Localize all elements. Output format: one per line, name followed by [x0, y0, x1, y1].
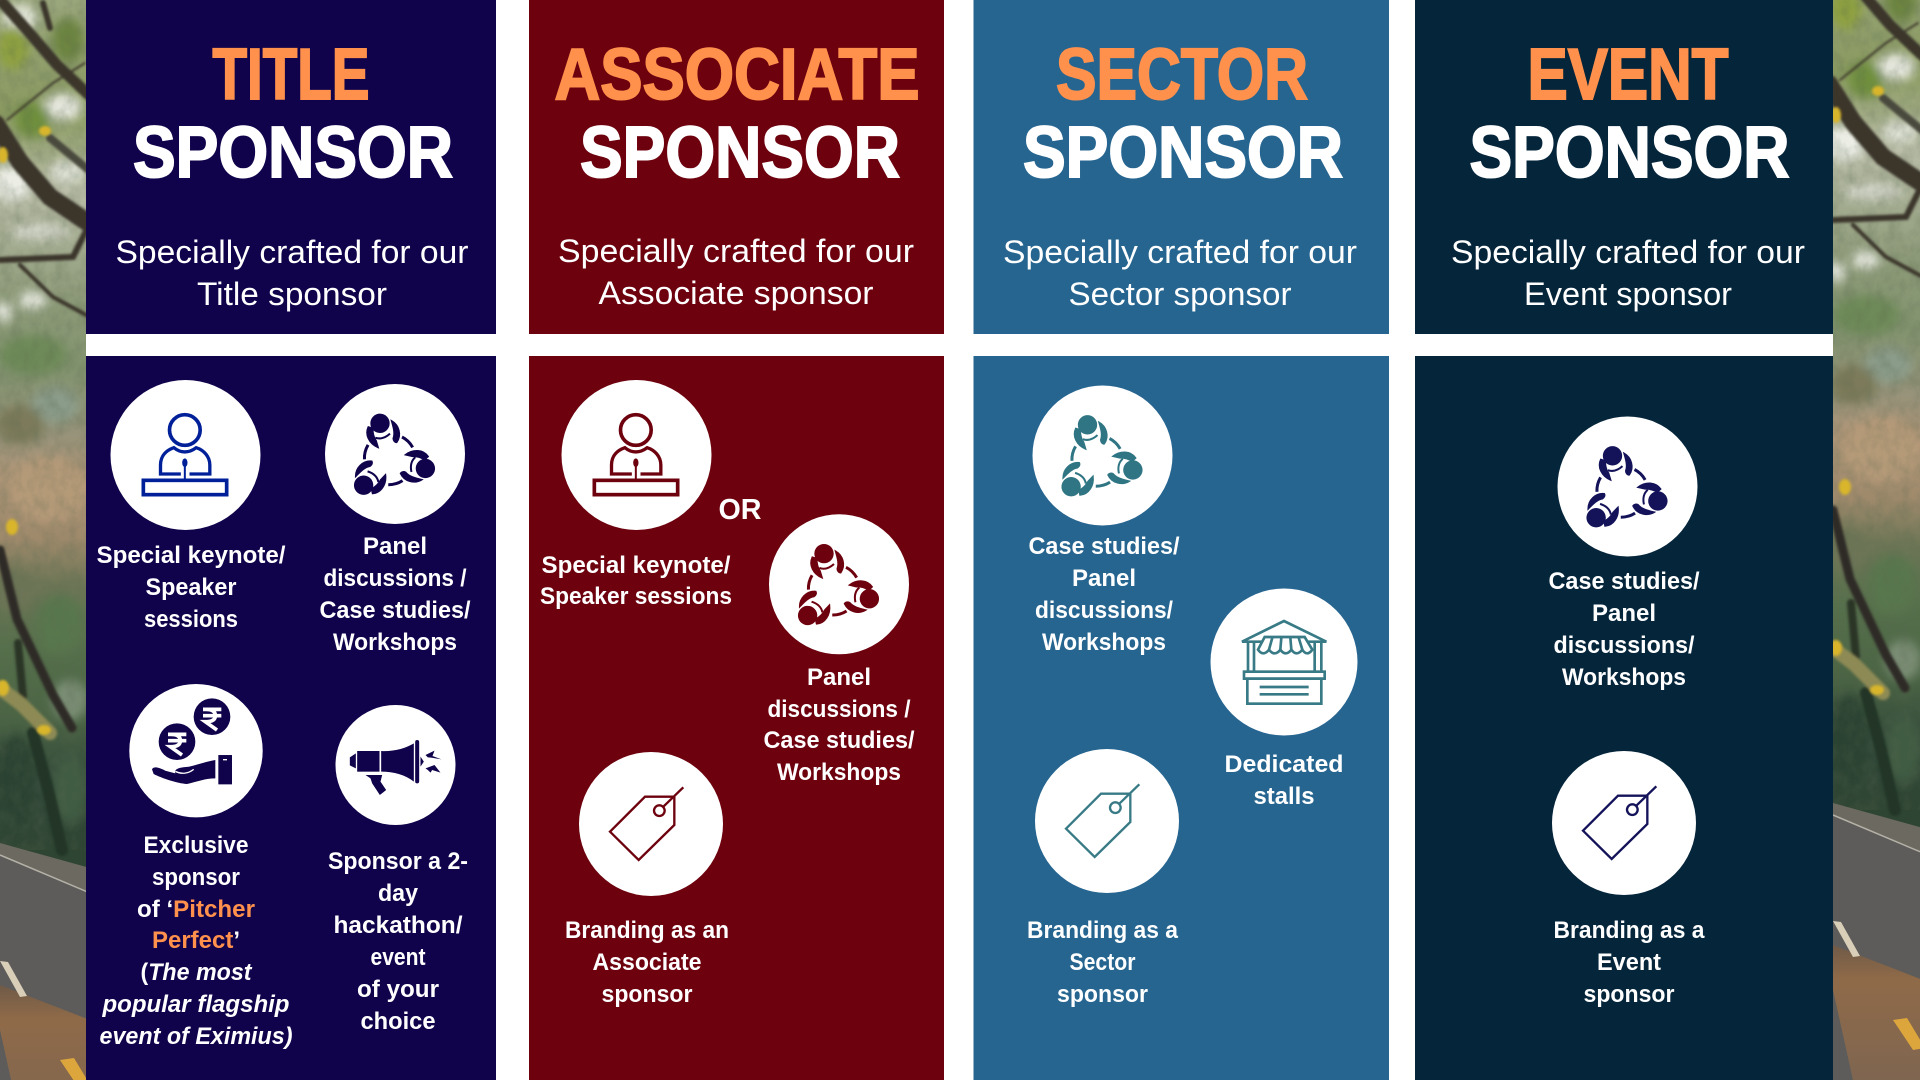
text: or: OR: [718, 494, 762, 526]
heading: title sponsor: TITLE: [212, 35, 370, 115]
text: pitcher perfect sponsorship: of ‘Pitcher: [137, 896, 255, 923]
icon: rupees over hand: [129, 684, 263, 817]
text: dedicated stalls: [1224, 751, 1344, 810]
text: panel discussions: Panel: [363, 533, 427, 560]
text: branding as sector: [1027, 917, 1179, 1008]
icon: panel discussion: [1558, 416, 1698, 556]
text: panel discussions: Case studies/: [320, 597, 471, 624]
text: sector sponsor description: Sector sponsor: [1068, 276, 1292, 312]
heading: event sponsor: SPONSOR: [1470, 113, 1790, 193]
text: hackathon sponsorship: Sponsor a 2-: [328, 848, 468, 875]
heading: event sponsor: [1470, 35, 1790, 193]
heading: associate sponsor: [554, 35, 920, 193]
text: pitcher perfect sponsorship: (The most: [140, 959, 252, 986]
text: branding as event: [1554, 917, 1705, 1008]
icon: keynote speaker: [562, 380, 712, 530]
column: title sponsor: [86, 0, 496, 1080]
text: pitcher perfect sponsorship: Perfect’: [152, 927, 240, 954]
text: panel discussions: Workshops: [333, 629, 457, 656]
text: branding as event: sponsor: [1584, 981, 1674, 1008]
text: branding as associate: [565, 917, 729, 1008]
text: case studies: [1028, 533, 1180, 656]
text: pitcher perfect sponsorship: popular flagship: [101, 991, 290, 1018]
text: case studies: [1548, 568, 1700, 691]
icon: market stall: [1210, 588, 1358, 736]
text: panel discussions: [764, 664, 915, 786]
icon: megaphone: [336, 705, 456, 825]
icon: panel discussion: [325, 384, 465, 524]
text: case studies: Workshops: [1562, 664, 1686, 691]
icon: panel discussion: [1032, 386, 1172, 526]
text: special keynote: Special keynote/: [96, 542, 286, 569]
icon: price tag: [579, 752, 723, 896]
text: associate sponsor description: Specially crafted for our: [558, 233, 914, 269]
icon: price tag: [1035, 749, 1179, 893]
text: case studies: Case studies/: [1548, 568, 1700, 595]
text: panel discussions: Panel: [807, 664, 871, 691]
text: hackathon sponsorship: event: [370, 944, 426, 971]
background photo: right strip of tree-lined road: [1825, 0, 1920, 1080]
heading: title sponsor: [133, 35, 453, 193]
text: panel discussions: Workshops: [777, 759, 901, 786]
text: hackathon sponsorship: day: [378, 880, 419, 907]
text: case studies: Case studies/: [1028, 533, 1180, 560]
heading: associate sponsor: SPONSOR: [580, 113, 900, 193]
heading: sector sponsor: SECTOR: [1056, 35, 1308, 115]
column: associate sponsor: [529, 0, 944, 1080]
panel: sector sponsor benefits: [974, 356, 1389, 1080]
text: event sponsor description: [1451, 234, 1805, 312]
panel: event sponsor benefits: [1415, 356, 1833, 1080]
text: case studies: discussions/: [1554, 632, 1695, 659]
panel: title sponsor header: [86, 0, 496, 334]
heading: event sponsor: EVENT: [1528, 35, 1729, 115]
text: branding as event: Branding as a: [1554, 917, 1705, 944]
text: associate sponsor description: Associate sponsor: [598, 275, 874, 311]
heading: associate sponsor: ASSOCIATE: [554, 35, 920, 115]
heading: sector sponsor: [1023, 35, 1343, 193]
text: title sponsor description: Title sponsor: [197, 276, 387, 312]
heading: title sponsor: SPONSOR: [133, 113, 453, 193]
text: panel discussions: discussions /: [768, 696, 911, 723]
text: branding as associate: Associate: [592, 949, 702, 976]
text: case studies: Panel: [1592, 600, 1656, 627]
text: branding as associate: Branding as an: [565, 917, 729, 944]
icon: panel discussion: [769, 514, 909, 654]
panel: associate sponsor benefits: [529, 356, 944, 1080]
text: special keynote: [96, 542, 286, 633]
text: pitcher perfect sponsorship: Exclusive: [144, 832, 248, 859]
text: branding as event: Event: [1597, 949, 1661, 976]
text: panel discussions: [320, 533, 471, 656]
text: branding as sector: Branding as a: [1027, 917, 1179, 944]
text: special keynote: sessions: [144, 606, 238, 633]
text: associate sponsor description: [558, 233, 914, 311]
text: hackathon sponsorship: choice: [360, 1008, 436, 1035]
text: event sponsor description: Specially crafted for our: [1451, 234, 1805, 270]
icon: keynote speaker: [110, 380, 260, 530]
text: branding as sector: sponsor: [1057, 981, 1148, 1008]
text: branding as sector: Sector: [1070, 949, 1136, 976]
text: dedicated stalls: Dedicated: [1224, 751, 1344, 778]
background photo: left strip of tree-lined road: [0, 0, 92, 1080]
text: panel discussions: discussions /: [324, 565, 467, 592]
text: hackathon sponsorship: [328, 848, 468, 1035]
text: sector sponsor description: [1003, 234, 1357, 312]
column: event sponsor: [1415, 0, 1833, 1080]
text: title sponsor description: Specially crafted for our: [116, 234, 469, 270]
text: special keynote: Special keynote/: [542, 552, 731, 579]
column: sector sponsor: [974, 0, 1389, 1080]
panel: sector sponsor header: [974, 0, 1389, 334]
icon: price tag: [1552, 751, 1696, 895]
panel: title sponsor benefits: [86, 356, 496, 1080]
text: sector sponsor description: Specially crafted for our: [1003, 234, 1357, 270]
panel: associate sponsor header: [529, 0, 944, 334]
text: title sponsor description: [116, 234, 469, 312]
text: panel discussions: Case studies/: [764, 727, 915, 754]
text: special keynote: [540, 552, 732, 610]
text: case studies: Panel: [1072, 565, 1136, 592]
text: dedicated stalls: stalls: [1254, 783, 1314, 810]
text: pitcher perfect sponsorship: event of Eximius): [100, 1023, 293, 1050]
text: pitcher perfect sponsorship: sponsor: [152, 864, 240, 891]
text: special keynote: Speaker: [146, 574, 236, 601]
text: branding as associate: sponsor: [602, 981, 692, 1008]
text: case studies: Workshops: [1042, 629, 1166, 656]
heading: sector sponsor: SPONSOR: [1023, 113, 1343, 193]
text: special keynote: Speaker sessions: [540, 583, 732, 610]
text: hackathon sponsorship: of your: [357, 976, 439, 1003]
text: event sponsor description: Event sponsor: [1524, 276, 1732, 312]
panel: event sponsor header: [1415, 0, 1833, 334]
text: pitcher perfect sponsorship: [100, 832, 293, 1050]
text: case studies: discussions/: [1035, 597, 1173, 624]
text: hackathon sponsorship: hackathon/: [334, 912, 463, 939]
